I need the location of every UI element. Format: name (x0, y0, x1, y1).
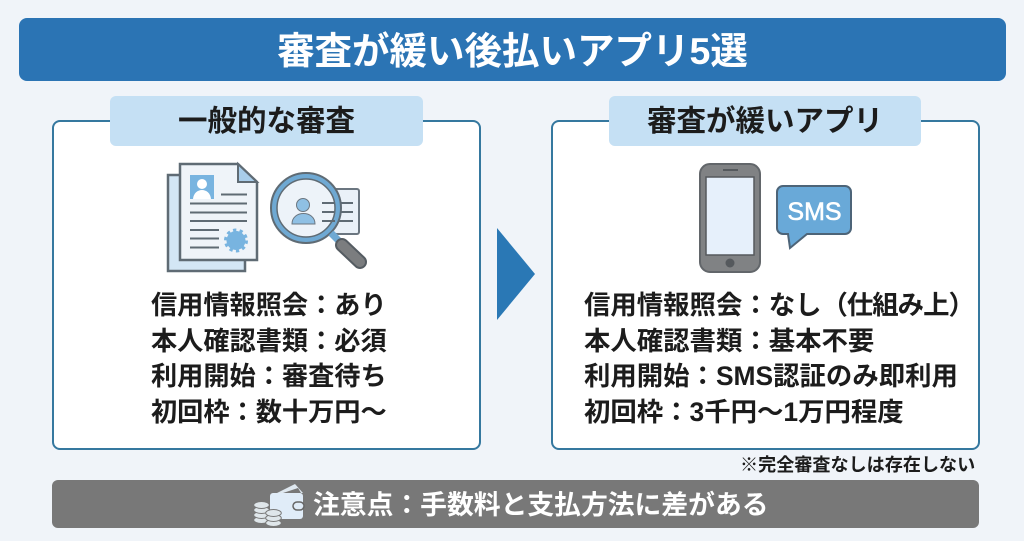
icon: SMS speech bubble: SMS (787, 198, 842, 226)
text block: general screening details (151, 290, 387, 426)
text block: general screening details: 初回枠：数十万円〜 (151, 396, 387, 426)
text block: lenient app details: 信用情報照会：なし（仕組み上） (584, 290, 974, 320)
text block: lenient app details: 初回枠：3千円〜1万円程度 (584, 396, 904, 426)
text block: general screening details: 利用開始：審査待ち (151, 361, 387, 391)
panel frame (52, 120, 481, 450)
text block: lenient app details (584, 290, 974, 426)
text block: general screening details: 信用情報照会：あり (151, 290, 387, 320)
icon: SMS speech bubble (776, 185, 852, 250)
caution text: 注意点：手数料と支払方法に差がある (313, 490, 769, 520)
panel frame (551, 120, 980, 450)
title banner: 審査が緩い後払いアプリ5選 (277, 30, 748, 72)
text block: lenient app details: 利用開始：SMS認証のみ即利用 (584, 361, 958, 391)
icon: documents and magnifier (166, 162, 367, 272)
arrow (497, 228, 535, 320)
panel: general screening (52, 96, 481, 450)
panel: lenient apps (551, 96, 980, 450)
heading: general screening: 一般的な審査 (178, 105, 355, 138)
heading: lenient apps (609, 96, 921, 146)
heading: lenient apps: 審査が緩いアプリ (647, 105, 883, 138)
heading: general screening (110, 96, 423, 146)
icon: wallet and coins (254, 484, 304, 526)
title banner (19, 18, 1006, 81)
text block: general screening details: 本人確認書類：必須 (151, 326, 387, 356)
text block: lenient app details: 本人確認書類：基本不要 (584, 326, 874, 356)
footnote: ※完全審査なしは存在しない (740, 455, 975, 475)
caution bar (52, 480, 979, 528)
icon: smartphone (699, 163, 761, 273)
